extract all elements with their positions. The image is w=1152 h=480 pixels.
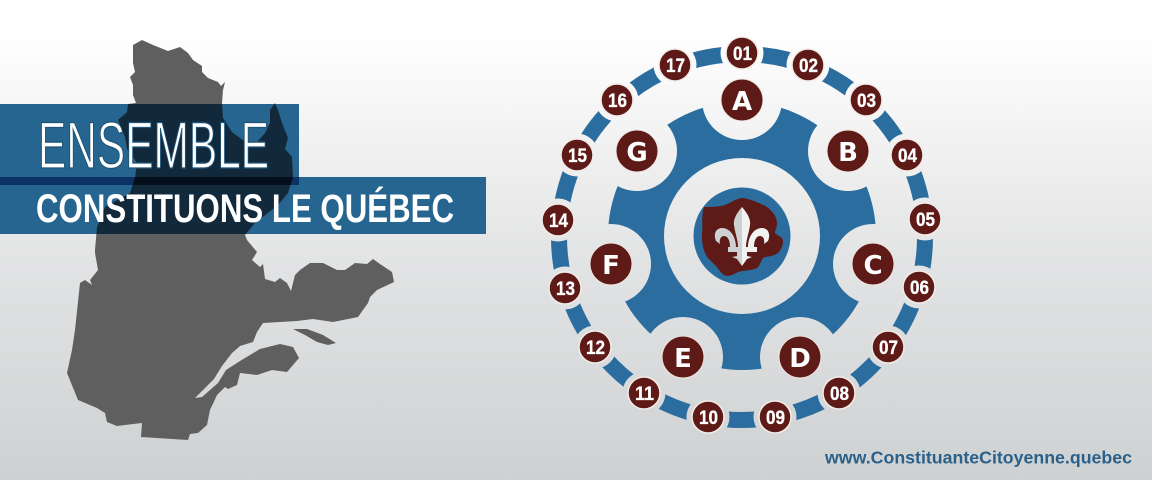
number nodes 01 to 17: 03 (857, 91, 876, 112)
number nodes 01 to 17: 01 (733, 44, 752, 65)
letter nodes A to G (590, 79, 894, 378)
letter nodes A to G: A (732, 87, 752, 117)
emblem: fleur-de-lis (702, 198, 783, 276)
number nodes 01 to 17: 14 (549, 211, 568, 232)
number nodes 01 to 17: 05 (916, 210, 935, 231)
website URL: www.ConstituanteCitoyenne.quebec (824, 448, 1132, 468)
letter nodes A to G: B (838, 138, 858, 168)
letter nodes A to G: D (789, 344, 811, 374)
number nodes 01 to 17: 02 (799, 56, 818, 77)
map overlap with banner (96, 104, 293, 234)
number nodes 01 to 17: 12 (586, 338, 605, 359)
letter nodes A to G: E (674, 344, 692, 374)
number nodes 01 to 17: 09 (766, 408, 785, 429)
banner: blue title bars (0, 104, 486, 234)
number nodes 01 to 17: 07 (879, 338, 898, 359)
number nodes 01 to 17: 11 (635, 384, 654, 405)
number nodes 01 to 17: 13 (556, 279, 575, 300)
central gear (608, 102, 876, 370)
central disc (694, 188, 790, 284)
number nodes 01 to 17: 15 (568, 146, 587, 167)
title: ENSEMBLE: ENSEMBLE (38, 108, 269, 182)
number nodes 01 to 17: 17 (666, 56, 685, 77)
number nodes 01 to 17: 08 (830, 384, 849, 405)
number nodes 01 to 17: 16 (608, 91, 627, 112)
number nodes 01 to 17: 10 (699, 408, 718, 429)
segmented outer ring (559, 54, 925, 420)
banner shadow strip (0, 177, 299, 185)
number nodes 01 to 17: 06 (910, 278, 929, 299)
letter nodes A to G: G (626, 138, 648, 168)
diagram: gear with numbered ring (542, 37, 941, 433)
letter nodes A to G: C (863, 251, 883, 281)
number nodes 01 to 17: 04 (898, 146, 917, 167)
number nodes 01 to 17 (542, 37, 941, 433)
letter nodes A to G: F (602, 251, 620, 281)
subtitle: CONSTITUONS LE QUÉBEC: CONSTITUONS LE QUÉBEC (36, 186, 454, 231)
map of Québec (67, 40, 394, 440)
